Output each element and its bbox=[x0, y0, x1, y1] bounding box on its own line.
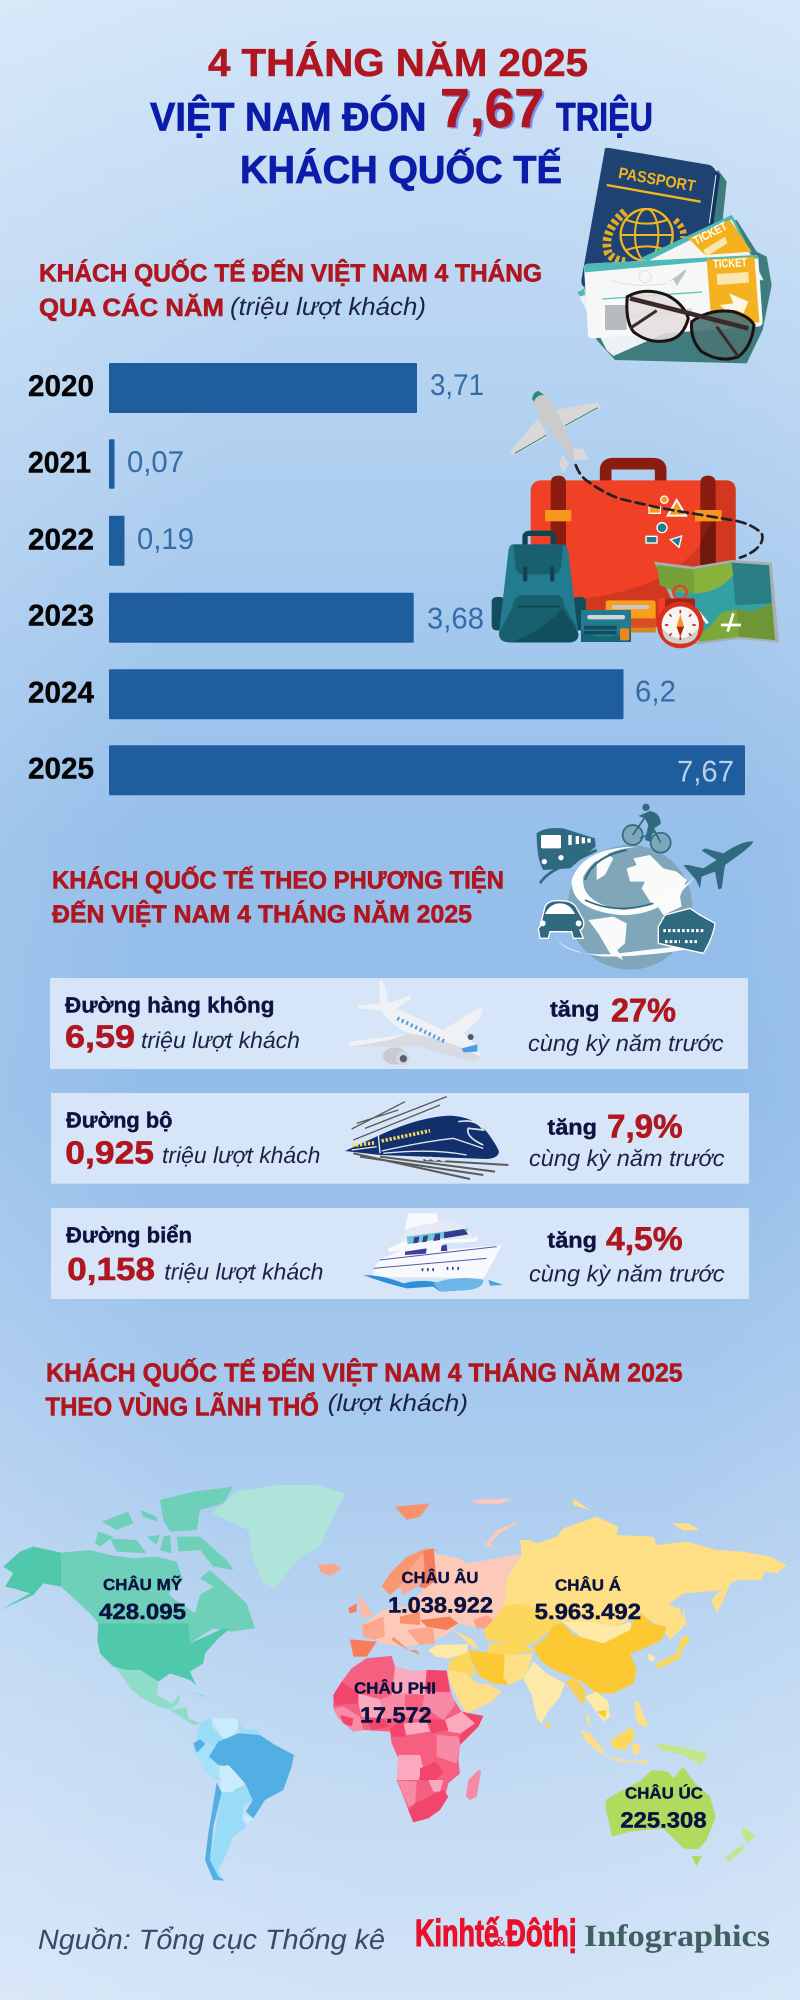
bar 2024 bbox=[28, 669, 676, 719]
road text block: 0,925 bbox=[65, 1134, 154, 1170]
icon: passport, tickets and sunglasses: TICKET bbox=[691, 219, 730, 248]
bar 2020: 3,71 bbox=[430, 369, 484, 402]
air text block: triệu lượt khách bbox=[141, 1027, 300, 1053]
panel: road transport bbox=[51, 1093, 749, 1184]
heading: by transport bbox=[52, 865, 504, 929]
road growth: 7,9% bbox=[607, 1107, 683, 1144]
label: Asia: CHÂU Á bbox=[555, 1576, 621, 1595]
label: Africa: CHÂU PHI bbox=[354, 1678, 436, 1697]
bar 2023: 2023 bbox=[28, 600, 94, 633]
label: Oceania bbox=[620, 1783, 707, 1832]
heading: by region: (lượt khách) bbox=[328, 1390, 468, 1417]
air growth bbox=[528, 992, 724, 1056]
logo: Infographics bbox=[584, 1918, 770, 1953]
icon: passport, tickets and sunglasses: PASSPORT bbox=[617, 165, 697, 196]
icon: passport, tickets and sunglasses bbox=[577, 148, 772, 363]
label: Europe bbox=[388, 1568, 493, 1618]
label: Oceania: CHÂU ÚC bbox=[625, 1783, 703, 1802]
bar 2023: 3,68 bbox=[427, 603, 484, 636]
bar 2024: 2024 bbox=[28, 676, 94, 709]
panel: sea transport bbox=[51, 1208, 749, 1299]
heading: by transport: ĐẾN VIỆT NAM 4 THÁNG NĂM 2025 bbox=[52, 900, 472, 929]
bar 2024: 6,2 bbox=[635, 676, 676, 709]
title: KHÁCH QUỐC TẾ bbox=[240, 148, 562, 192]
sea growth: 4,5% bbox=[606, 1220, 683, 1257]
bar 2022: 2022 bbox=[28, 523, 94, 556]
air growth: tăng bbox=[550, 997, 600, 1022]
label: Africa bbox=[354, 1678, 436, 1727]
label: Europe: 1.038.922 bbox=[388, 1593, 493, 1618]
title bbox=[150, 41, 653, 192]
label: Asia: 5.963.492 bbox=[535, 1599, 641, 1624]
bar 2020: 2020 bbox=[28, 370, 94, 403]
bar 2022: 0,19 bbox=[137, 523, 194, 556]
map: North America north and Greenland bbox=[0, 1485, 345, 1643]
road growth bbox=[529, 1107, 725, 1171]
icon: airplane bbox=[349, 980, 483, 1065]
bar 2025: 2025 bbox=[28, 753, 94, 786]
heading: arrivals over the years: (triệu lượt khách) bbox=[230, 293, 426, 321]
icon: globe with transport bbox=[537, 804, 753, 970]
icon: passport, tickets and sunglasses: TICKET bbox=[713, 255, 748, 271]
world map with regional figures bbox=[0, 1485, 787, 1881]
map: Africa, southern Asia and Oceania bbox=[333, 1644, 755, 1866]
label: Americas: 428.095 bbox=[99, 1599, 186, 1624]
road text block: Đường bộ bbox=[66, 1108, 172, 1133]
logo: Đôthị bbox=[506, 1913, 576, 1955]
icon: cruise ship bbox=[363, 1213, 503, 1292]
heading: by transport: KHÁCH QUỐC TẾ THEO PHƯƠNG TIỆN bbox=[52, 865, 504, 894]
logo: Kinhtế bbox=[415, 1913, 500, 1955]
heading: arrivals over the years: KHÁCH QUỐC TẾ ĐẾN VIỆT NAM 4 THÁNG bbox=[39, 259, 542, 288]
label: Asia bbox=[535, 1576, 641, 1624]
heading: arrivals over the years bbox=[39, 259, 542, 322]
road growth: tăng bbox=[547, 1114, 597, 1139]
bar 2021: 0,07 bbox=[127, 446, 184, 479]
air text block: Đường hàng không bbox=[65, 993, 274, 1018]
logo bbox=[415, 1913, 770, 1955]
bar 2021: 2021 bbox=[28, 447, 91, 480]
heading: by region: KHÁCH QUỐC TẾ ĐẾN VIỆT NAM 4 THÁNG NĂM 2025 bbox=[46, 1358, 683, 1388]
heading: by region bbox=[45, 1358, 683, 1421]
heading: arrivals over the years: QUA CÁC NĂM bbox=[39, 293, 224, 322]
title: 4 THÁNG NĂM 2025 bbox=[208, 41, 588, 85]
road text block: triệu lượt khách bbox=[162, 1142, 320, 1168]
bar 2025: 7,67 bbox=[677, 756, 734, 789]
bar 2021 bbox=[28, 439, 184, 489]
label: Americas bbox=[99, 1575, 186, 1624]
sea growth: cùng kỳ năm trước bbox=[529, 1260, 725, 1286]
bar 2025 bbox=[28, 745, 745, 795]
air growth: cùng kỳ năm trước bbox=[528, 1030, 724, 1056]
label: Americas: CHÂU MỸ bbox=[103, 1575, 182, 1594]
bar 2020 bbox=[28, 363, 484, 413]
sea text block: Đường biển bbox=[66, 1223, 192, 1248]
panel: air transport bbox=[50, 978, 748, 1069]
sea text block: triệu lượt khách bbox=[164, 1258, 324, 1284]
air growth: 27% bbox=[611, 992, 676, 1029]
bar 2022 bbox=[28, 516, 194, 566]
sea growth: tăng bbox=[547, 1228, 597, 1253]
label: Africa: 17.572 bbox=[360, 1702, 432, 1727]
icon: train bbox=[345, 1097, 508, 1179]
title: TRIỆU bbox=[556, 95, 653, 140]
map: Europe and northern Asia bbox=[348, 1498, 787, 1693]
title: 7,67 bbox=[442, 78, 546, 140]
label: Europe: CHÂU ÂU bbox=[402, 1568, 478, 1587]
road text block bbox=[65, 1108, 320, 1170]
bar 2023 bbox=[28, 593, 484, 643]
title: 7,67 bbox=[440, 77, 544, 139]
label: Oceania: 225.308 bbox=[620, 1807, 707, 1832]
sea text block: 0,158 bbox=[67, 1251, 155, 1287]
heading: by region: THEO VÙNG LÃNH THỔ bbox=[45, 1391, 319, 1421]
air text block bbox=[65, 993, 300, 1055]
title: VIỆT NAM ĐÓN bbox=[150, 95, 426, 140]
source: Nguồn: Tổng cục Thống kê bbox=[38, 1924, 385, 1955]
road growth: cùng kỳ năm trước bbox=[529, 1145, 725, 1171]
icon: airplane, suitcase, backpack, map and compass bbox=[492, 391, 779, 648]
sea text block bbox=[66, 1223, 324, 1287]
map: USA, Central and South America bbox=[97, 1623, 294, 1881]
logo: & bbox=[495, 1934, 506, 1949]
sea growth bbox=[529, 1220, 725, 1286]
bar chart: arrivals by year bbox=[28, 363, 745, 795]
air text block: 6,59 bbox=[65, 1019, 135, 1055]
